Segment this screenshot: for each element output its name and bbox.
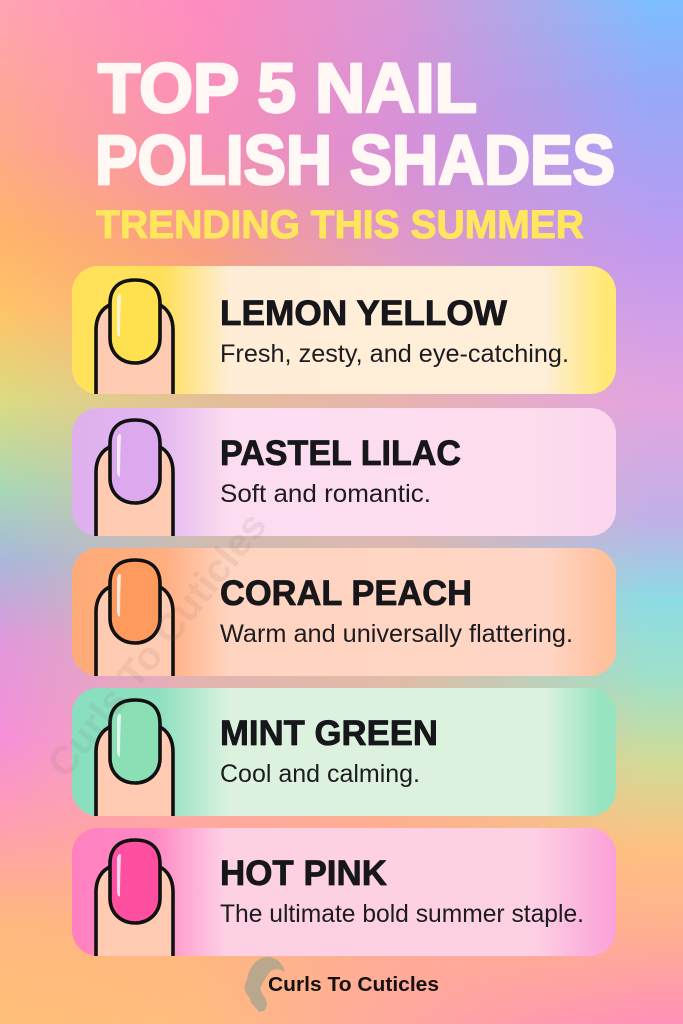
- panel: hot pink: [72, 828, 616, 956]
- heading: coral peach: CORAL PEACH: [220, 573, 472, 613]
- description: hot pink: The ultimate bold summer staple.: [220, 900, 584, 928]
- heading: mint green: MINT GREEN: [220, 713, 438, 753]
- title: TOP 5 NAIL: [98, 49, 477, 127]
- watermark: Curls To Cuticles: [39, 504, 275, 786]
- brand name: Curls To Cuticles: [268, 974, 439, 996]
- panel: pastel lilac: [72, 408, 616, 536]
- description: lemon yellow: Fresh, zesty, and eye-catching.: [220, 340, 569, 368]
- description: pastel lilac: Soft and romantic.: [220, 480, 431, 508]
- title: POLISH SHADES: [95, 121, 615, 199]
- heading: lemon yellow: LEMON YELLOW: [220, 293, 507, 333]
- icon: mint green nail: [96, 700, 173, 816]
- icon: hot pink nail: [96, 840, 173, 956]
- subtitle: TRENDING THIS SUMMER: [96, 203, 584, 247]
- icon: coral peach nail: [96, 560, 173, 676]
- icon: pastel lilac nail: [96, 420, 173, 536]
- description: mint green: Cool and calming.: [220, 760, 420, 788]
- title: [95, 49, 615, 199]
- heading: pastel lilac: PASTEL LILAC: [220, 433, 461, 473]
- panel: mint green: [72, 688, 616, 816]
- heading: hot pink: HOT PINK: [220, 853, 387, 893]
- description: coral peach: Warm and universally flattering.: [220, 620, 573, 648]
- panel: coral peach: [72, 548, 616, 676]
- panel: lemon yellow: [72, 266, 616, 394]
- icon: logo hair silhouette: [245, 957, 285, 1012]
- icon: lemon yellow nail: [96, 280, 173, 394]
